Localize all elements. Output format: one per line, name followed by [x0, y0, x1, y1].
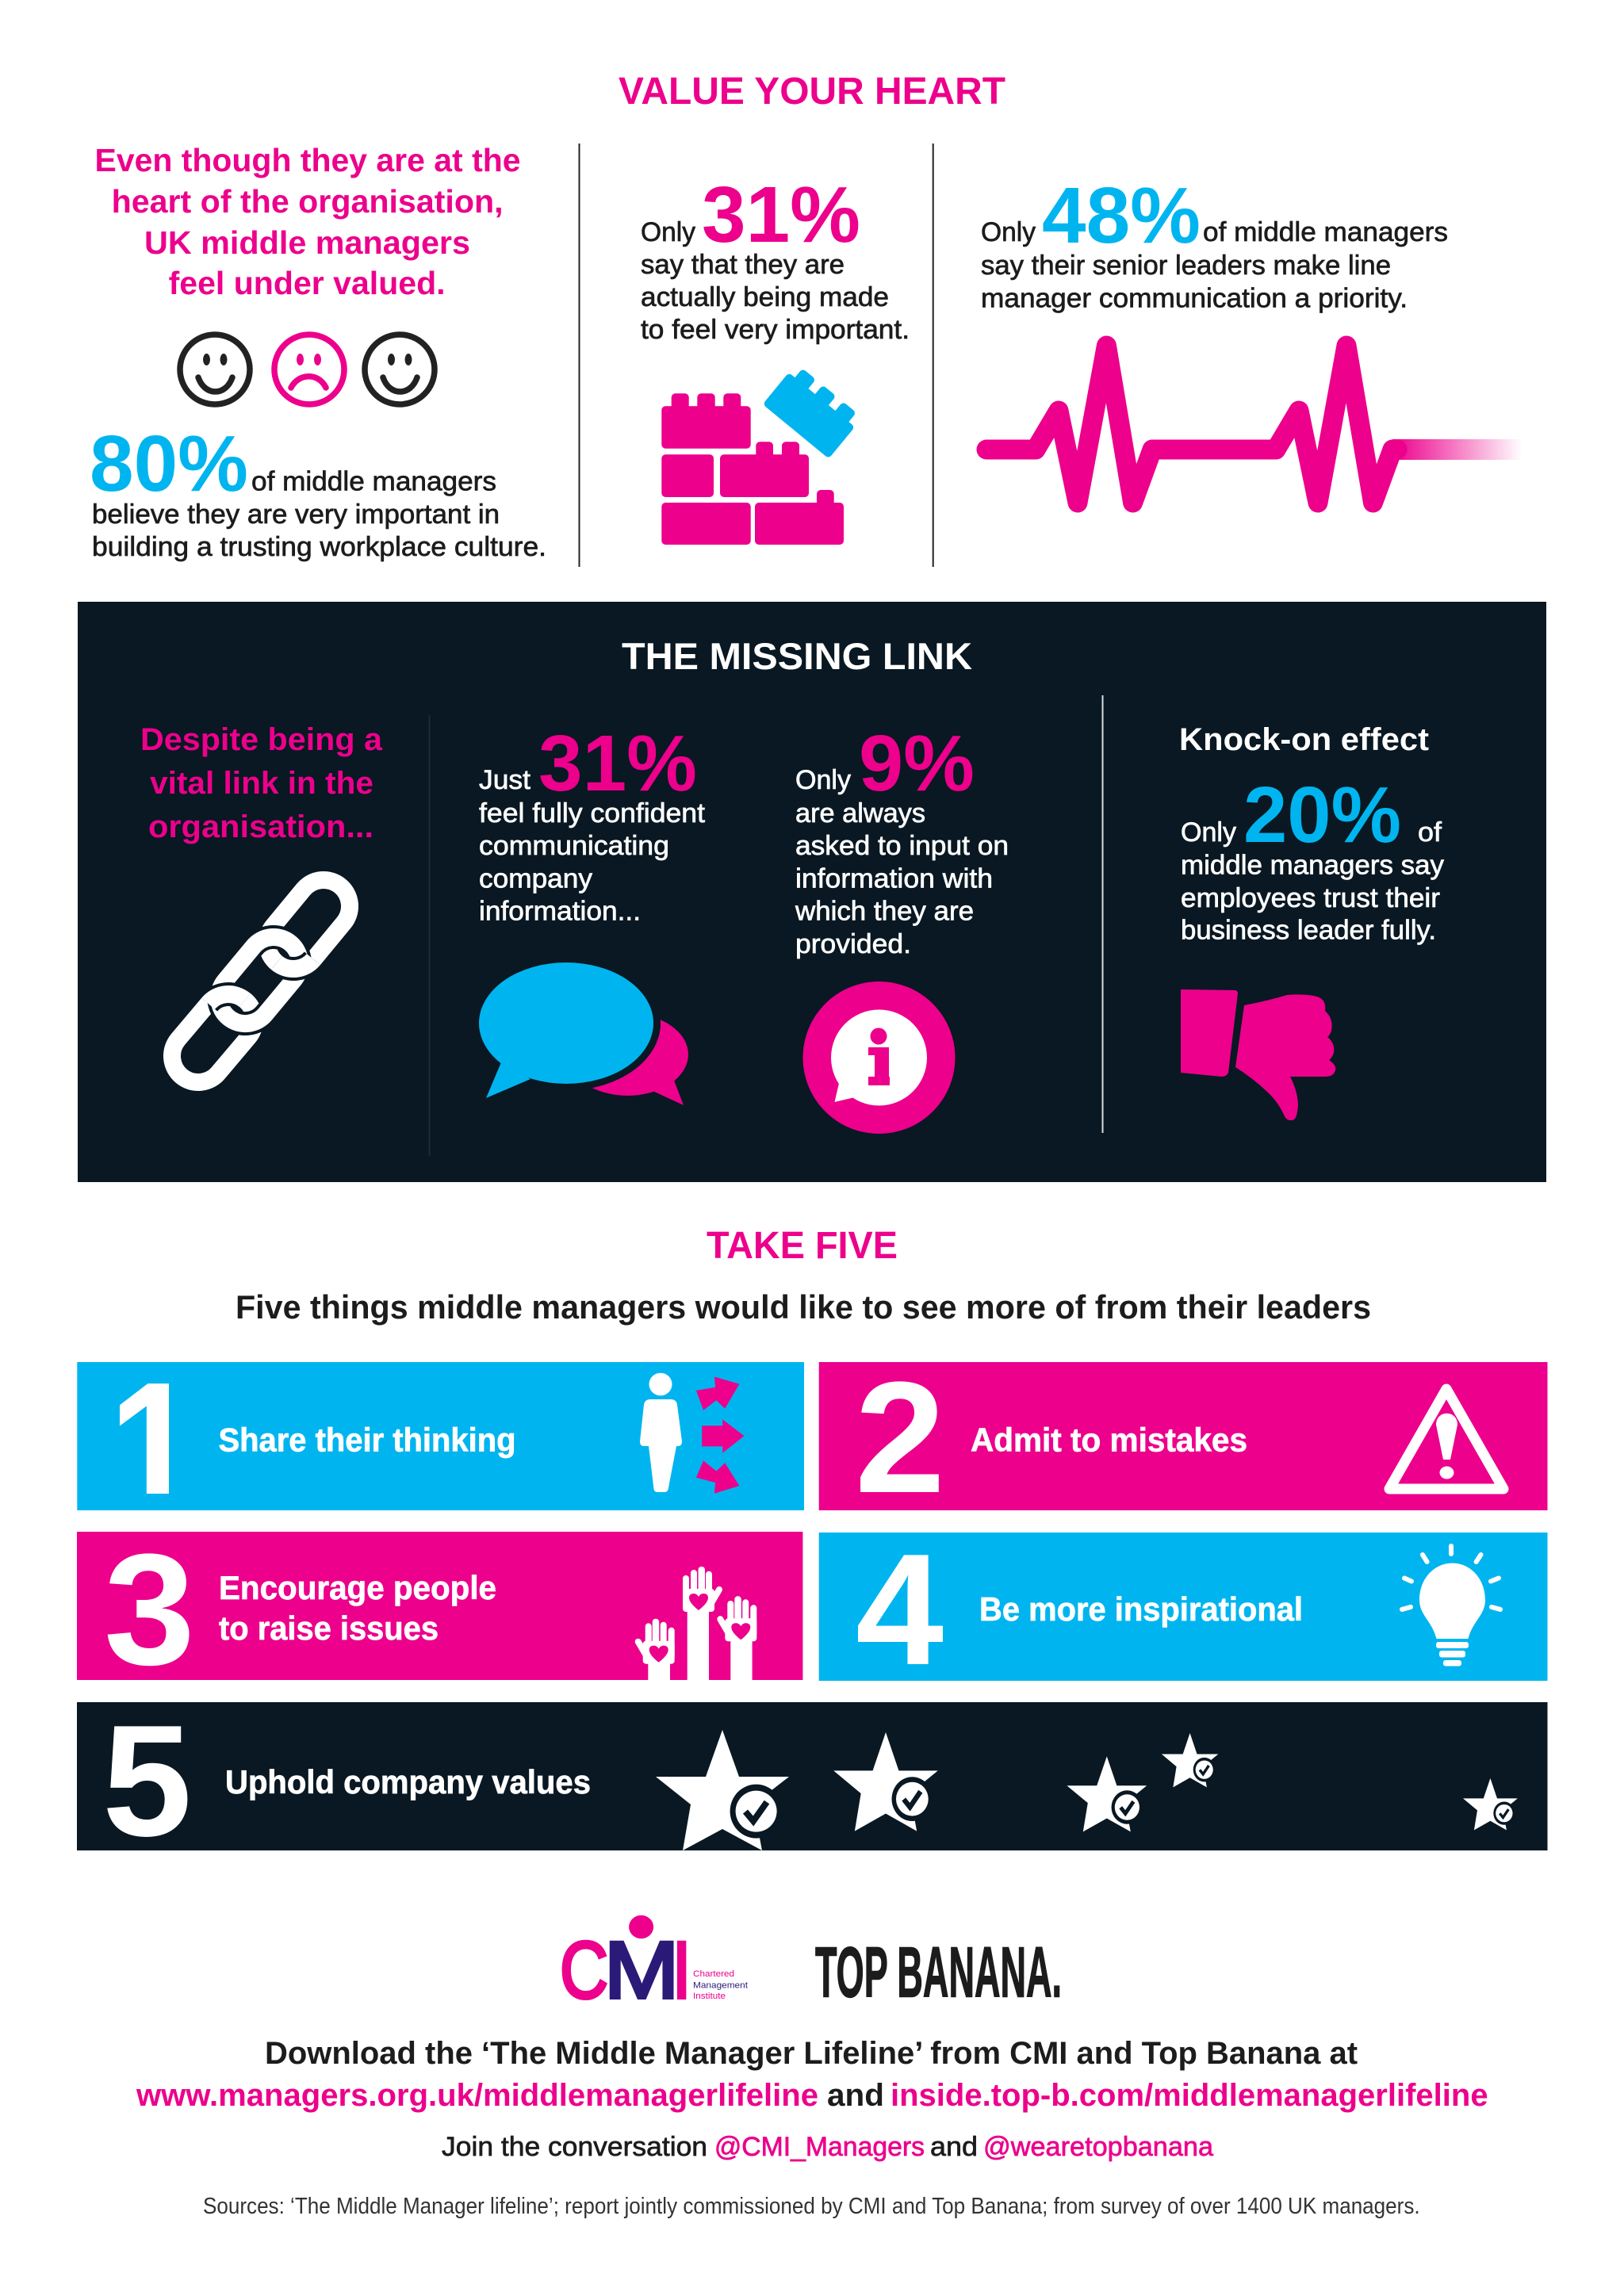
number 3: 3	[104, 1521, 195, 1698]
item text: Admit to mistakes	[971, 1422, 1247, 1459]
icon: warning triangle	[1389, 1389, 1503, 1489]
stat text: 31%	[479, 798, 706, 926]
just label: Just	[479, 765, 531, 795]
logo: CMI: Management	[693, 1981, 748, 1991]
download text: and	[827, 2078, 884, 2113]
stat text: 20%	[1181, 851, 1444, 945]
heading: value your heart: VALUE YOUR HEART	[619, 71, 1005, 113]
panel: item 2	[819, 1349, 1548, 1526]
item text: Encourage people	[219, 1569, 496, 1606]
stat text: 9%: provided.	[795, 929, 911, 959]
panel: 9% asked to input	[795, 719, 1009, 1134]
stat text: 31%: actually being made	[641, 282, 889, 312]
social media line: @wearetopbanana	[983, 2132, 1213, 2162]
panel: item 1	[77, 1362, 804, 1510]
panel: 48% senior leaders	[981, 171, 1522, 503]
stat text: 9%	[795, 798, 1009, 959]
pink statement: Despite being a	[140, 722, 383, 757]
stat text: 31%: to feel very important.	[641, 315, 910, 345]
number 2: 2	[855, 1349, 945, 1526]
panel: 31% feel very important	[641, 170, 910, 545]
icon: stars with check marks	[656, 1730, 1518, 1850]
pink statement: feel under valued.	[169, 265, 446, 301]
panel: item 5	[77, 1693, 1548, 1869]
logo: CMI: Institute	[693, 1992, 726, 2001]
stat: 31%: 31%	[538, 719, 697, 808]
logo: CMI: I	[672, 1925, 691, 2015]
stat text: 31%: information...	[479, 896, 641, 926]
stat text: 31%: say that they are	[641, 250, 845, 280]
panel: 31% confident	[472, 719, 706, 1105]
social media line: Join the conversation	[442, 2132, 707, 2162]
social media line	[442, 2132, 1213, 2162]
logo: CMI: M	[604, 1925, 680, 2015]
pink statement: organisation...	[148, 809, 373, 844]
section: value your heart	[90, 71, 1522, 562]
icon: person with arrows	[640, 1373, 744, 1494]
of label: of	[1418, 817, 1442, 848]
number 1: 1	[109, 1342, 199, 1557]
item text	[219, 1569, 496, 1647]
stat text: 31%: company	[479, 864, 592, 894]
stat text: 48%: manager communication a priority.	[981, 284, 1408, 314]
stat: 9%: 9%	[859, 719, 975, 808]
pink statement: vital link in the	[150, 766, 373, 801]
logo: CMI: Chartered	[693, 1969, 734, 1979]
icon part: tilted cyan brick	[763, 363, 863, 459]
download text: Download the ‘The Middle Manager Lifeline’ from CMI and Top Banana at	[265, 2036, 1358, 2071]
pink statement: Even though they are at the	[95, 142, 520, 178]
stat: 20%: 20%	[1243, 771, 1401, 859]
icon: thumbs down	[1181, 989, 1335, 1120]
icon: toy bricks	[661, 363, 863, 545]
number 5: 5	[102, 1693, 192, 1869]
icon: smiley faces	[180, 335, 435, 404]
item text: Be more inspirational	[979, 1590, 1303, 1628]
download text	[136, 2036, 1488, 2113]
pink statement: UK middle managers	[144, 224, 470, 261]
stat: 80%: 80%	[90, 419, 248, 508]
stat text: 80%: building a trusting workplace culture.	[92, 532, 546, 562]
subheading: knock-on effect: Knock-on effect	[1179, 722, 1429, 757]
stat: 48%: 48%	[1042, 171, 1201, 260]
item text: Uphold company values	[225, 1763, 591, 1800]
pink statement	[95, 142, 520, 301]
only label: Only	[795, 765, 851, 795]
heading: the missing link: THE MISSING LINK	[622, 635, 972, 677]
only label: Only	[1181, 817, 1236, 848]
stat: 31%: 31%	[702, 170, 860, 259]
icon: information bubble	[802, 982, 955, 1134]
panel background	[78, 602, 1546, 1182]
item background	[77, 1362, 804, 1510]
icon: light bulb	[1402, 1546, 1500, 1667]
social media line: @CMI_Managers	[714, 2132, 925, 2162]
logo: CMI	[560, 1915, 748, 2015]
stat text: 48%: of middle managers	[1203, 217, 1448, 247]
stat text: 20%: middle managers say	[1181, 851, 1444, 881]
stat text: 80%: believe they are very important in	[92, 499, 500, 530]
logo: CMI: C	[560, 1925, 608, 2015]
logo: Top Banana: TOP BANANA.	[815, 1934, 1062, 2013]
item background	[77, 1702, 1548, 1850]
icon: heartbeat line	[986, 346, 1522, 503]
panel: item 4	[819, 1521, 1548, 1698]
stat text: 31%: feel fully confident	[479, 798, 706, 828]
stat text: 31%	[641, 250, 910, 345]
stat text: 9%: are always	[795, 798, 925, 828]
stat text: 48%: say their senior leaders make line	[981, 251, 1391, 281]
stat text: 80%	[92, 466, 546, 562]
social media line: and	[930, 2132, 978, 2162]
item background	[77, 1532, 802, 1680]
item background	[819, 1362, 1548, 1510]
stat text: 9%: which they are	[795, 896, 974, 926]
item background	[819, 1533, 1548, 1681]
section: take five	[77, 1225, 1548, 1869]
pink statement: heart of the organisation,	[112, 183, 504, 220]
download text: www.managers.org.uk/middlemanagerlifeline	[136, 2078, 818, 2113]
sources note: Sources: ‘The Middle Manager lifeline’; report jointly commissioned by CMI and Top Banana; from survey of over 1400 UK managers.	[203, 2194, 1420, 2219]
panel: under valued intro	[90, 142, 546, 562]
only label: Only	[641, 217, 695, 247]
stat text: 9%: asked to input on	[795, 831, 1009, 861]
subheading: Five things middle managers would like to see more of from their leaders	[236, 1288, 1371, 1326]
stat text: 31%: communicating	[479, 831, 669, 861]
stat text: 20%: employees trust their	[1181, 883, 1440, 913]
stat text: 9%: information with	[795, 864, 993, 894]
icon: speech bubbles	[472, 956, 688, 1105]
heading: take five: TAKE FIVE	[707, 1225, 898, 1267]
number 4: 4	[856, 1521, 944, 1698]
icon: chain	[172, 880, 350, 1082]
section: the missing link	[78, 602, 1546, 1182]
only label: Only	[981, 217, 1036, 247]
stat text: 48%	[981, 217, 1448, 314]
item text: Share their thinking	[219, 1422, 515, 1459]
download text: inside.top-b.com/middlemanagerlifeline	[891, 2078, 1488, 2113]
stat text: 20%: business leader fully.	[1181, 915, 1436, 945]
panel: item 3	[77, 1521, 802, 1720]
pink statement	[140, 722, 383, 844]
panel: knock-on effect	[1179, 722, 1444, 1120]
stat text: 80%: of middle managers	[251, 466, 496, 496]
item text: to raise issues	[219, 1609, 439, 1647]
icon: raised hands with hearts	[638, 1567, 756, 1720]
